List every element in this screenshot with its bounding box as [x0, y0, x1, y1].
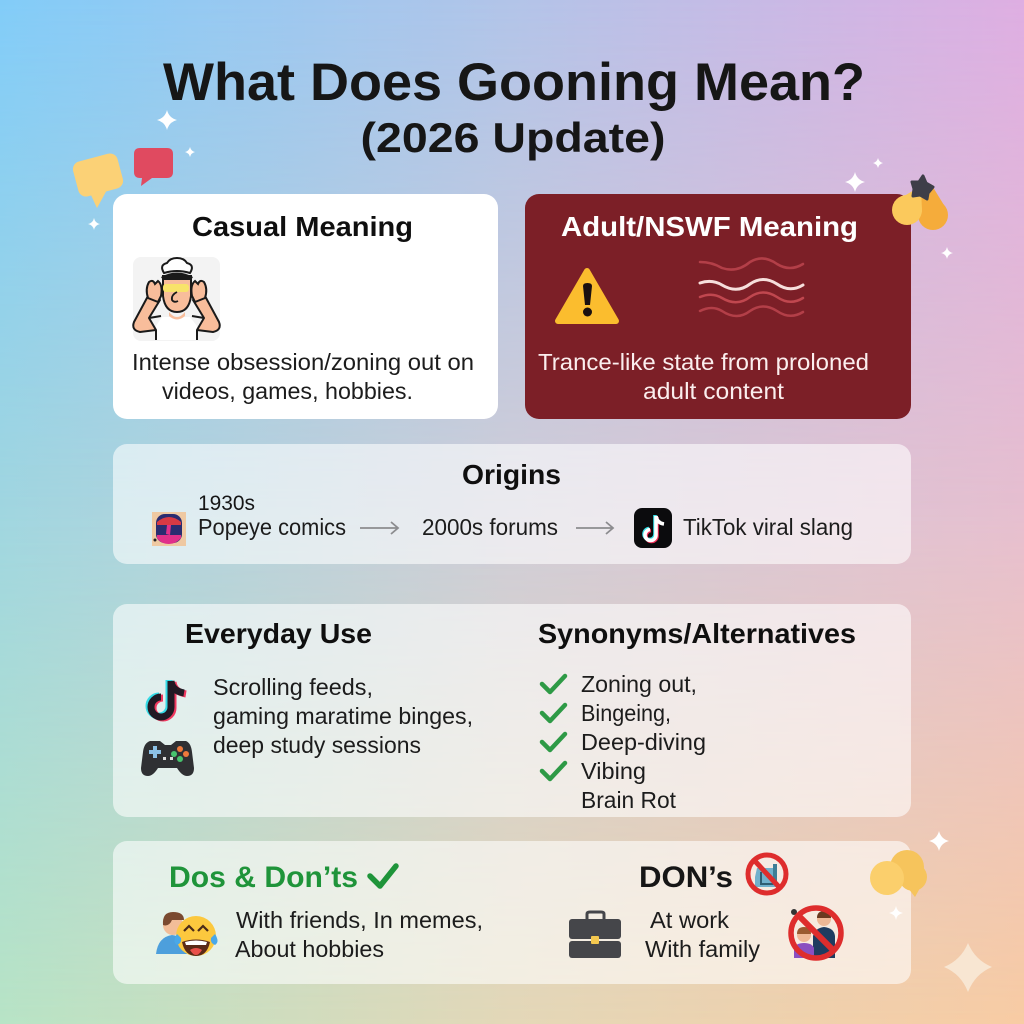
title: (2026 Update) — [360, 114, 666, 161]
text: synonyms list: Deep-diving — [581, 729, 706, 755]
text: synonyms list: Brain Rot — [581, 787, 677, 813]
text: adult definition: Trance-like state from proloned — [538, 349, 869, 375]
text: casual definition: videos, games, hobbies. — [162, 378, 413, 404]
text: dos list: About hobbies — [235, 936, 384, 962]
timeline step: 2000s forums: 2000s forums — [422, 514, 558, 540]
title: What Does Gooning Mean? — [163, 53, 865, 112]
text: don'ts list: At work — [650, 907, 730, 933]
panel: everyday use and synonyms — [113, 604, 911, 817]
heading: synonyms: Synonyms/Alternatives — [538, 618, 856, 649]
timeline step: TikTok viral slang: TikTok viral slang — [683, 514, 853, 540]
speech bubbles icon — [71, 148, 173, 208]
panel: origins — [113, 444, 911, 564]
panel: dos and don'ts — [113, 841, 911, 984]
text: synonyms list — [581, 671, 706, 813]
text: everyday use list: Scrolling feeds, — [213, 674, 373, 700]
arrow: to forums — [360, 522, 398, 534]
icon: man with hands on head — [133, 257, 220, 341]
icon: friend with laughing emoji — [156, 912, 218, 956]
text: casual definition — [132, 349, 474, 404]
text: casual definition: Intense obsession/zoning out on — [132, 349, 474, 375]
yellow teardrop — [892, 186, 922, 225]
heading: everyday use: Everyday Use — [185, 618, 372, 649]
heading: casual meaning: Casual Meaning — [192, 211, 413, 242]
icon: warning triangle — [558, 271, 616, 321]
decorative sparkles — [88, 110, 992, 992]
heading: dos: Dos & Don’ts — [169, 861, 358, 894]
timeline step: 1930s Popeye comics: 1930s — [198, 492, 255, 515]
text: adult definition: adult content — [643, 378, 785, 404]
icon: yellow blobs — [870, 850, 927, 897]
text: synonyms list: Zoning out, — [581, 671, 697, 697]
icon: prohibited office — [748, 855, 786, 893]
text: don'ts list: With family — [645, 936, 761, 962]
text: dos list: With friends, In memes, — [236, 907, 483, 933]
icon: TikTok note — [149, 680, 186, 718]
arrow: to TikTok — [576, 522, 613, 534]
dark star — [912, 176, 933, 199]
icon: Popeye comic cover — [152, 512, 186, 546]
red speech bubble — [134, 148, 173, 186]
text: synonyms list: Bingeing, — [581, 700, 671, 726]
text: dos list — [235, 907, 483, 962]
panel: casual meaning — [113, 194, 498, 419]
sparkle near bottom right — [889, 906, 903, 920]
icon: yellow blobs with dark star — [892, 176, 948, 230]
heading: don'ts: DON’s — [639, 861, 733, 894]
text: synonyms list: Vibing — [581, 758, 646, 784]
text: everyday use list: gaming maratime binges, — [213, 703, 473, 729]
text: don'ts list — [645, 907, 761, 962]
icons: green check marks — [542, 676, 565, 779]
icon: trance waves — [700, 258, 803, 316]
timeline step: 1930s Popeye comics — [198, 492, 346, 540]
title — [163, 53, 865, 161]
icon: game controller — [141, 741, 194, 776]
text: everyday use list — [213, 674, 473, 758]
orange teardrop — [918, 184, 948, 230]
yellow speech bubble — [71, 152, 125, 208]
timeline step: 1930s Popeye comics: Popeye comics — [198, 514, 346, 540]
heading: origins: Origins — [462, 459, 561, 490]
panel: adult/NSFW meaning — [525, 194, 911, 419]
icon: briefcase — [569, 912, 621, 958]
text: adult definition — [538, 349, 869, 404]
text: everyday use list: deep study sessions — [213, 732, 421, 758]
icon: prohibited family — [791, 908, 841, 958]
heading: adult meaning: Adult/NSWF Meaning — [561, 211, 858, 242]
icon: green check — [370, 866, 396, 886]
icon: TikTok app tile — [634, 508, 672, 548]
